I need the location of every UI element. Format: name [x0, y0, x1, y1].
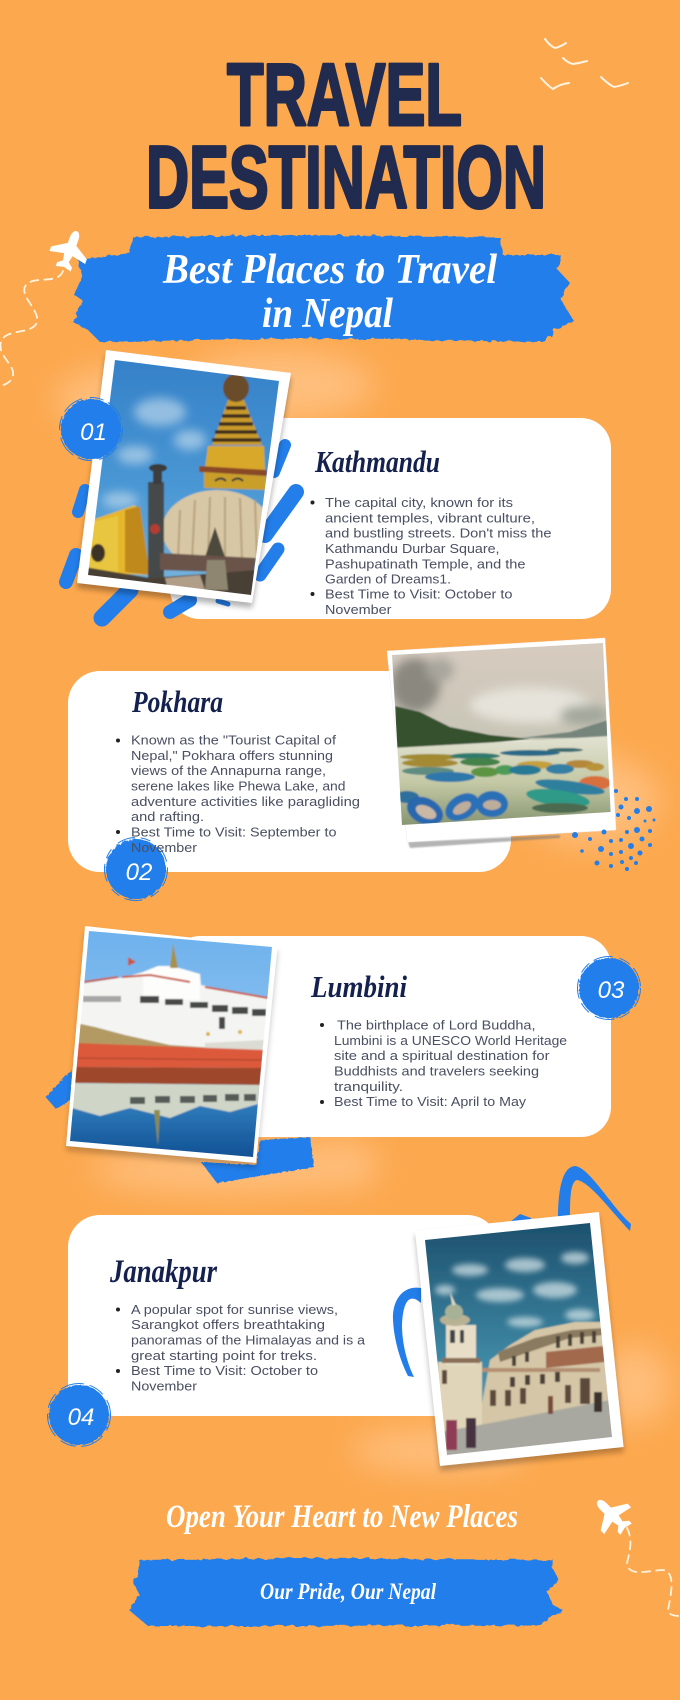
photo: Swayambhunath stupa — [77, 350, 291, 608]
description list — [116, 732, 360, 855]
description list: The capital city, known for its — [325, 495, 513, 510]
decorative dots — [572, 789, 656, 871]
number badge 04: 04 — [68, 1404, 94, 1431]
number badge 02 — [104, 838, 168, 900]
heading: Kathmandu — [314, 444, 440, 479]
heading: Janakpur — [109, 1254, 218, 1290]
blue curved stroke left — [393, 1288, 421, 1377]
panel: Lumbini — [46, 925, 640, 1183]
card — [170, 936, 611, 1137]
title: TRAVEL — [227, 45, 462, 144]
subtitle banner: in Nepal — [262, 291, 393, 337]
description list: great starting point for treks. — [131, 1348, 317, 1363]
description list: A popular spot for sunrise views, — [131, 1302, 338, 1317]
description list: The birthplace of Lord Buddha, — [337, 1018, 536, 1032]
description list: Best Time to Visit: October to — [325, 587, 512, 602]
description list: Nepal," Pokhara offers stunning — [131, 748, 333, 763]
birds — [541, 39, 628, 89]
panel: Janakpur — [48, 1166, 631, 1471]
number badge 03 — [578, 956, 640, 1020]
title — [146, 45, 546, 226]
description list: November — [131, 840, 198, 855]
description list: Garden of Dreams1. — [325, 572, 451, 586]
description list: panoramas of the Himalayas and is a — [131, 1332, 366, 1348]
description list: tranquility. — [334, 1079, 403, 1094]
number badge 01: 01 — [80, 419, 107, 446]
description list: Known as the "Tourist Capital of — [131, 732, 336, 748]
description list: site and a spiritual destination for — [334, 1048, 550, 1063]
decorative watercolor clouds — [55, 350, 670, 1472]
description list — [320, 1018, 567, 1109]
description list — [310, 495, 552, 617]
description list: ancient temples, vibrant culture, — [325, 510, 535, 525]
description list: Best Time to Visit: September to — [131, 824, 336, 840]
number badge 02: 02 — [126, 859, 152, 886]
blue brush strokes — [66, 445, 296, 618]
tagline: Open Your Heart to New Places — [166, 1499, 518, 1535]
description list: Lumbini is a UNESCO World Heritage — [334, 1033, 567, 1048]
description list: Sarangkot offers breathtaking — [131, 1317, 325, 1332]
description list: Pashupatinath Temple, and the — [325, 556, 526, 571]
description list: Buddhists and travelers seeking — [334, 1064, 539, 1078]
description list: adventure activities like paragliding — [131, 794, 360, 809]
photo: Maya Devi Temple — [60, 925, 280, 1168]
description list: and rafting. — [131, 809, 204, 824]
description list: views of the Annapurna range, — [131, 763, 326, 778]
panel: Pokhara — [68, 638, 656, 900]
description list: November — [131, 1378, 198, 1394]
description list: November — [325, 602, 392, 617]
blue curved strokes top — [510, 1166, 631, 1231]
photo: Janaki Mandir — [415, 1212, 624, 1471]
description list: Kathmandu Durbar Square, — [325, 541, 500, 556]
heading: Lumbini — [310, 969, 407, 1004]
photo: Phewa Lake boats — [385, 638, 616, 848]
subtitle banner: Best Places to Travel — [162, 247, 497, 293]
number badge 03: 03 — [598, 977, 625, 1004]
icon: airplane with dashed route top — [0, 225, 95, 386]
description list: and bustling streets. Don't miss the — [325, 526, 552, 541]
description list: serene lakes like Phewa Lake, and — [131, 778, 346, 794]
card — [170, 418, 611, 619]
description list: Best Time to Visit: October to — [131, 1363, 318, 1378]
number badge 04 — [48, 1384, 110, 1446]
card — [68, 1215, 499, 1416]
card — [68, 671, 511, 872]
blue brush strokes — [46, 1070, 314, 1183]
footer banner — [129, 1558, 563, 1626]
description list — [116, 1302, 366, 1394]
number badge 01 — [60, 398, 122, 460]
heading: Pokhara — [131, 684, 223, 719]
subtitle banner — [73, 235, 574, 342]
description list: Best Time to Visit: April to May — [334, 1094, 526, 1109]
panel: Kathmandu — [60, 350, 611, 619]
footer banner: Our Pride, Our Nepal — [260, 1579, 437, 1604]
icon: airplane with dashed route bottom — [584, 1487, 680, 1616]
